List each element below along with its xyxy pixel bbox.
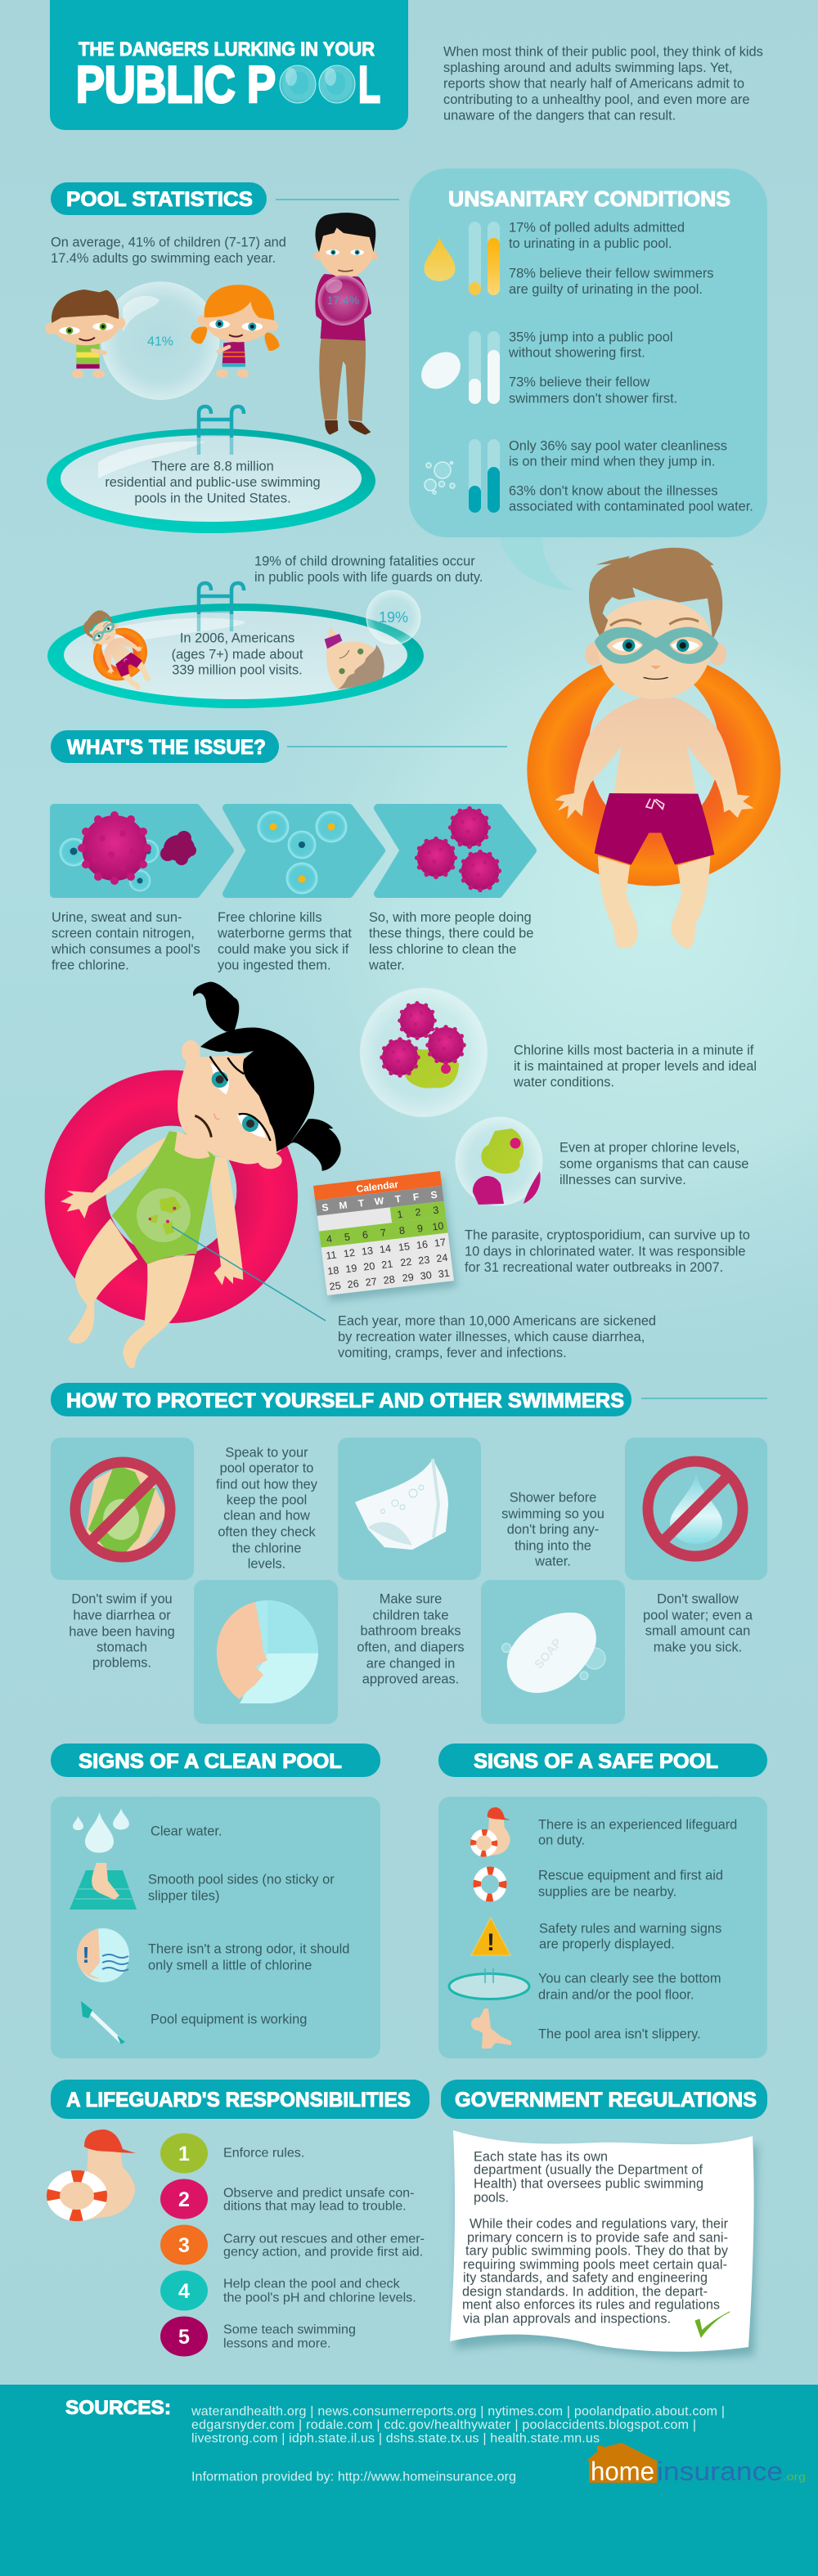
panel: issue step 1 xyxy=(54,808,230,894)
heading: how to protect xyxy=(51,1383,767,1416)
pool graphic: 339 million visits xyxy=(47,583,424,708)
issue text columns: free chlorine. xyxy=(52,958,129,973)
icon: bar of soap xyxy=(502,1613,605,1693)
icon: life ring xyxy=(474,1868,506,1901)
illustration: lifeguard xyxy=(49,2129,136,2220)
illustration: adult with 17.4% bubble xyxy=(313,213,378,435)
text: shower stats xyxy=(508,330,677,406)
paper: government regulations text: ity standards, and safety and engineering xyxy=(463,2270,708,2285)
title line two: OO xyxy=(281,57,354,110)
text: don't swim: stomach xyxy=(97,1640,147,1655)
step 2: Observe and predict unsafe con- xyxy=(223,2185,414,2200)
icon: warning sign: ! xyxy=(487,1929,495,1956)
stat text: swimmers xyxy=(51,236,286,266)
calendar: F xyxy=(412,1191,420,1203)
text: cryptosporidium xyxy=(465,1228,750,1275)
icon: odor xyxy=(77,1928,129,1982)
text: speak to operator: pool operator to xyxy=(220,1461,313,1475)
heading: signs of a clean pool xyxy=(51,1744,380,1777)
text: illnesses callout: Each year, more than 10,000 Americans are sickened xyxy=(338,1313,656,1328)
text: illnesses callout: vomiting, cramps, fever and infections. xyxy=(338,1346,567,1361)
text: chlorine kills bacteria xyxy=(513,1043,757,1089)
visits text: (ages 7+) made about xyxy=(172,648,303,662)
calendar: 14 xyxy=(379,1243,392,1255)
calendar: 4 xyxy=(326,1233,333,1245)
text: urination stats: to urinating in a public pool. xyxy=(509,236,672,251)
issue text columns: So, with more people doing xyxy=(369,910,532,925)
calendar: 13 xyxy=(361,1245,374,1258)
paper: government regulations text: While their codes and regulations vary, their xyxy=(470,2216,729,2231)
heading: what's the issue xyxy=(51,730,507,763)
text: make sure: Make sure xyxy=(380,1591,442,1606)
text: don't swim xyxy=(69,1591,175,1670)
big germ xyxy=(78,811,151,885)
text: make sure: often, and diapers xyxy=(357,1640,465,1655)
text: awareness stats xyxy=(509,438,753,514)
issue text columns: these things, there could be xyxy=(369,926,533,940)
intro paragraph: contributing to a unhealthy pool, and even more are xyxy=(443,92,750,107)
paper: government regulations text: Each state has its own xyxy=(474,2149,608,2164)
text: shower before swimming: thing into the xyxy=(515,1539,591,1554)
illustration: kids with 41% bubble: 41% xyxy=(147,334,173,348)
text: don't swim: problems. xyxy=(92,1655,151,1670)
callout line xyxy=(172,1227,326,1321)
icon: test tube xyxy=(81,2001,124,2044)
paper: government regulations text: via plan approvals and inspections. xyxy=(463,2311,671,2326)
step 5: Some teach swimming xyxy=(223,2322,356,2337)
text: rescue equipment: Rescue equipment and first aid xyxy=(538,1868,723,1883)
issue text columns: screen contain nitrogen, xyxy=(52,926,195,940)
calendar: 11 xyxy=(326,1249,337,1262)
text: no strong odor: only smell a little of chlorine xyxy=(148,1958,312,1972)
step 3: Carry out rescues and other emer- xyxy=(223,2231,425,2246)
calendar: 2 xyxy=(415,1206,421,1218)
panel: issue step 2 xyxy=(227,808,381,894)
text: don't swim: have been having xyxy=(69,1624,175,1639)
visits text: In 2006, Americans xyxy=(180,631,294,646)
step 2 xyxy=(160,2179,414,2219)
paper: government regulations text: ment also enforces its rules and regulations xyxy=(462,2298,720,2313)
calendar: 12 xyxy=(343,1247,356,1259)
text: drowning stat xyxy=(254,554,483,585)
text: don't swallow: pool water; even a xyxy=(643,1608,753,1622)
heading: a lifeguard's responsibilities: A LIFEGUARD'S RESPONSIBILITIES xyxy=(66,2089,411,2112)
text: cryptosporidium: for 31 recreational water outbreaks in 2007. xyxy=(465,1260,723,1275)
heading: what's the issue: WHAT'S THE ISSUE? xyxy=(67,736,266,759)
text: cryptosporidium: The parasite, cryptosporidium, can survive up to xyxy=(465,1228,750,1243)
icon: diaper xyxy=(355,1459,448,1550)
panel: issue step 3 xyxy=(378,806,533,894)
text: shower stats: 73% believe their fellow xyxy=(509,375,649,389)
text: pool equipment: Pool equipment is working xyxy=(151,2012,307,2026)
sources list: edgarsnyder.com | rodale.com | cdc.gov/healthywater | poolaccidents.blogspot.com | xyxy=(191,2418,696,2432)
text: clear bottom: You can clearly see the bottom xyxy=(538,1971,721,1986)
icon: bar of soap: SOAP xyxy=(532,1636,565,1672)
icon: soap xyxy=(414,344,468,397)
text: chlorine kills bacteria: it is maintained at proper levels and ideal xyxy=(514,1059,757,1074)
intro paragraph xyxy=(443,44,763,123)
text: make sure: approved areas. xyxy=(362,1672,459,1686)
calendar: T xyxy=(394,1193,402,1205)
text: lifeguard on duty: There is an experienced lifeguard xyxy=(538,1817,737,1832)
paper: government regulations text: design standards. In addition, the depart- xyxy=(462,2285,708,2300)
panel: no swimming when sick xyxy=(51,1438,194,1580)
intro paragraph: reports show that nearly half of Americans admit to xyxy=(443,77,744,92)
calendar: 17 xyxy=(434,1236,447,1249)
calendar: 8 xyxy=(398,1225,406,1236)
heading: a lifeguard's responsibilities xyxy=(51,2080,429,2119)
calendar: 1 xyxy=(397,1209,403,1220)
text: smooth pool sides xyxy=(148,1873,335,1904)
calendar: 30 xyxy=(420,1269,433,1282)
pool graphic: 8.8 million pools xyxy=(47,406,375,533)
calendar: 25 xyxy=(329,1280,342,1293)
intro paragraph: splashing around and adults swimming laps. Yet, xyxy=(443,61,733,75)
icon: face profile xyxy=(217,1600,318,1703)
pool stat text: There are 8.8 million xyxy=(151,460,274,474)
text: speak to operator: the chlorine xyxy=(232,1541,301,1555)
small germs in bubbles xyxy=(60,838,159,891)
text: surviving organisms: some organisms that can cause xyxy=(560,1156,748,1171)
paper: government regulations text: requiring swimming pools meet certain qual- xyxy=(463,2257,727,2272)
text: urination stats: are guilty of urinating in the pool. xyxy=(509,282,703,297)
icon: bubbles xyxy=(425,461,455,494)
paper: government regulations text: Health) that oversees public swimming xyxy=(474,2177,703,2192)
pool stat text xyxy=(105,460,321,505)
issue text columns: Free chlorine kills xyxy=(218,910,322,925)
step 2: 2 xyxy=(178,2188,190,2211)
panel: soap xyxy=(481,1580,625,1724)
text: don't swim: have diarrhea or xyxy=(73,1608,171,1622)
logo: home insurance: insurance xyxy=(657,2457,783,2486)
step 2: ditions that may lead to trouble. xyxy=(223,2198,407,2213)
calendar: 28 xyxy=(383,1273,396,1286)
text: shower before swimming: don't bring any- xyxy=(507,1523,599,1537)
chart: awareness bars xyxy=(469,439,500,513)
calendar: 26 xyxy=(347,1278,360,1290)
issue text columns: which consumes a pool's xyxy=(51,942,200,957)
paper: government regulations text: pools. xyxy=(474,2190,509,2205)
text: urination stats xyxy=(509,221,714,297)
sources list: livestrong.com | idph.state.il.us | dshs.state.tx.us | health.state.mn.us xyxy=(191,2432,600,2445)
icon: check mark xyxy=(695,2312,730,2337)
icon: slipping figure xyxy=(471,2008,511,2049)
text: clear bottom xyxy=(538,1971,721,2002)
text: clear water: Clear water. xyxy=(151,1824,222,1838)
calendar: 29 xyxy=(402,1272,415,1284)
stat text: swimmers: 17.4% adults go swimming each year. xyxy=(51,251,276,266)
pool stat text: residential and public-use swimming xyxy=(105,475,321,490)
panel: diaper xyxy=(338,1438,481,1580)
text: safety rules: are properly displayed. xyxy=(539,1936,675,1951)
heading: government regulations: GOVERNMENT REGULATIONS xyxy=(455,2089,757,2112)
text: shower before swimming: swimming so you xyxy=(501,1506,605,1521)
text: illnesses callout: by recreation water illnesses, which cause diarrhea, xyxy=(338,1330,645,1344)
calendar: 22 xyxy=(400,1256,412,1268)
calendar: 6 xyxy=(362,1229,369,1241)
title line two: L xyxy=(358,56,380,114)
text: not slippery: The pool area isn't slippery. xyxy=(538,2026,701,2041)
text: safety rules: Safety rules and warning signs xyxy=(539,1922,721,1936)
calendar: S xyxy=(430,1189,438,1201)
text: no strong odor xyxy=(148,1941,349,1972)
ladder xyxy=(199,583,244,631)
heading: signs of a safe pool xyxy=(438,1744,767,1777)
text: awareness stats: 63% don't know about the illnesses xyxy=(509,484,718,499)
text: urination stats: 17% of polled adults admitted xyxy=(509,221,685,236)
calendar: 15 xyxy=(398,1241,411,1254)
step 4: 4 xyxy=(178,2280,190,2303)
icon: urine drop xyxy=(424,237,455,281)
step 4 xyxy=(160,2270,416,2311)
calendar: 18 xyxy=(327,1264,339,1277)
swimmer boy mini xyxy=(68,599,166,702)
text: no strong odor: There isn't a strong odor, it should xyxy=(148,1941,349,1956)
panel: nose xyxy=(194,1580,338,1724)
19% bubble: 19% xyxy=(379,609,408,626)
icon: prohibited water drop xyxy=(648,1461,743,1556)
paper: government regulations text: department (usually the Department of xyxy=(474,2162,703,2177)
heading: signs of a clean pool: SIGNS OF A CLEAN POOL xyxy=(79,1750,342,1773)
text: urination stats: 78% believe their fellow swimmers xyxy=(509,267,714,281)
calendar: 9 xyxy=(416,1223,424,1235)
calendar: 23 xyxy=(418,1254,430,1267)
icon: prohibited stomach xyxy=(75,1462,170,1557)
girl xyxy=(191,285,280,378)
chart: shower bars xyxy=(469,331,500,404)
calendar: T xyxy=(357,1197,366,1209)
illustration: big boy in orange float xyxy=(527,548,780,949)
germ bubble: chlorine kills bacteria xyxy=(360,988,488,1117)
panel: unsanitary conditions xyxy=(409,168,767,590)
icon: lifeguard xyxy=(471,1807,510,1856)
text: surviving organisms xyxy=(560,1140,748,1187)
information credit: Information provided by: http://www.homeinsurance.org xyxy=(191,2470,516,2484)
text: speak to operator: often they check xyxy=(218,1524,316,1539)
chart: urination bars xyxy=(469,222,500,295)
19% bubble xyxy=(366,590,420,644)
issue text columns: less chlorine to clean the xyxy=(369,942,516,957)
heading: unsanitary conditions: UNSANITARY CONDITIONS xyxy=(448,186,730,211)
swimmer girl mini xyxy=(325,627,384,689)
panel: don't swallow xyxy=(625,1438,767,1580)
calendar: 7 xyxy=(380,1227,387,1239)
icon: water drops xyxy=(73,1808,129,1853)
issue text columns xyxy=(51,910,533,973)
heading: signs of a safe pool: SIGNS OF A SAFE POOL xyxy=(474,1750,718,1773)
step 1: 1 xyxy=(178,2143,190,2165)
text: speak to operator: keep the pool xyxy=(227,1493,307,1508)
text: make sure: bathroom breaks xyxy=(360,1624,461,1639)
issue text columns: waterborne germs that xyxy=(217,926,352,940)
text: speak to operator: levels. xyxy=(248,1557,285,1572)
text: chlorine kills bacteria: Chlorine kills most bacteria in a minute if xyxy=(514,1043,754,1058)
text: smooth pool sides: Smooth pool sides (no sticky or xyxy=(148,1873,335,1887)
text: make sure xyxy=(357,1591,465,1686)
calendar: M xyxy=(339,1199,348,1211)
heading: how to protect: HOW TO PROTECT YOURSELF AND OTHER SWIMMERS xyxy=(66,1389,624,1412)
step 4: the pool's pH and chlorine levels. xyxy=(223,2290,416,2304)
text: make sure: are changed in xyxy=(366,1657,455,1672)
calendar: Calendar xyxy=(356,1178,399,1195)
icon: mini pool xyxy=(449,1968,529,1999)
text: safety rules xyxy=(539,1922,721,1951)
text: clear bottom: drain and/or the pool floor. xyxy=(538,1987,694,2002)
step 5: lessons and more. xyxy=(223,2336,331,2350)
logo: home insurance xyxy=(587,2443,806,2486)
stat text: swimmers: On average, 41% of children (7-17) and xyxy=(51,236,286,250)
germ bubble: surviving organisms xyxy=(456,1117,542,1205)
text: lifeguard on duty: on duty. xyxy=(538,1833,585,1848)
icon: foot on tiles xyxy=(70,1863,137,1910)
text: drowning stat: in public pools with life guards on duty. xyxy=(254,570,483,585)
paper: government regulations text: primary concern is to provide safe and sani- xyxy=(467,2231,728,2246)
calendar: 3 xyxy=(433,1205,439,1216)
calendar: 31 xyxy=(438,1268,451,1280)
calendar: 20 xyxy=(363,1260,375,1273)
title banner xyxy=(50,0,408,130)
step 5: 5 xyxy=(178,2326,190,2349)
list: lifeguard responsibilities xyxy=(160,2133,425,2357)
title line one: THE DANGERS LURKING IN YOUR xyxy=(79,38,375,61)
boy xyxy=(45,289,125,378)
text: cryptosporidium: 10 days in chlorinated water. It was responsible xyxy=(465,1245,745,1259)
three germs xyxy=(415,806,501,892)
calendar: 5 xyxy=(344,1231,351,1243)
logo: home insurance: .org xyxy=(783,2471,806,2483)
text: drowning stat: 19% of child drowning fatalities occur xyxy=(254,554,475,569)
text: speak to operator xyxy=(216,1446,318,1572)
text: don't swallow: Don't swallow xyxy=(657,1591,739,1606)
issue text columns: Urine, sweat and sun- xyxy=(52,910,182,925)
sources heading: SOURCES: xyxy=(65,2397,171,2419)
illustration: kids with 41% bubble xyxy=(45,282,280,400)
icon: odor: ! xyxy=(82,1942,90,1968)
illustration: adult with 17.4% bubble: 17.4% xyxy=(327,294,359,307)
heading: pool statistics xyxy=(51,182,399,215)
sources list xyxy=(191,2404,725,2445)
text: shower before swimming: Shower before xyxy=(510,1490,596,1505)
text: don't swallow xyxy=(643,1591,753,1655)
text: don't swim: Don't swim if you xyxy=(71,1591,173,1606)
step 4: Help clean the pool and check xyxy=(223,2277,401,2291)
text: chlorine kills bacteria: water conditions. xyxy=(513,1075,614,1089)
issue text columns: you ingested them. xyxy=(218,958,330,973)
pool stat text: pools in the United States. xyxy=(134,491,291,505)
heading: government regulations xyxy=(441,2080,767,2119)
step 3: 3 xyxy=(178,2234,190,2257)
text: shower before swimming xyxy=(501,1490,605,1568)
calendar: W xyxy=(374,1195,385,1207)
calendar: 21 xyxy=(381,1259,393,1271)
visits text: 339 million pool visits. xyxy=(172,662,303,677)
text: awareness stats: is on their mind when they jump in. xyxy=(509,455,715,469)
issue text columns: could make you sick if xyxy=(218,942,349,957)
text: don't swallow: small amount can xyxy=(645,1624,750,1639)
footer: sources xyxy=(0,2385,818,2576)
text: shower stats: swimmers don't shower first. xyxy=(509,391,677,406)
calendar: 27 xyxy=(365,1276,378,1288)
text: don't swallow: make you sick. xyxy=(654,1640,742,1655)
calendar: S xyxy=(321,1201,329,1214)
dark germ xyxy=(160,831,196,865)
ladder xyxy=(199,406,244,455)
text: speak to operator: clean and how xyxy=(223,1508,310,1523)
visits text xyxy=(172,631,303,677)
text: surviving organisms: Even at proper chlorine levels, xyxy=(560,1140,739,1155)
text: shower stats: 35% jump into a public pool xyxy=(509,330,672,345)
calendar: 16 xyxy=(416,1239,429,1251)
text: speak to operator: find out how they xyxy=(216,1477,318,1492)
text: speak to operator: Speak to your xyxy=(225,1446,308,1461)
bubbles with germs xyxy=(258,811,347,894)
step 1: Enforce rules. xyxy=(223,2146,304,2161)
step 5 xyxy=(160,2316,356,2357)
text: illnesses callout xyxy=(338,1313,656,1361)
text: shower before swimming: water. xyxy=(534,1554,571,1568)
step 1 xyxy=(160,2133,304,2174)
text: rescue equipment xyxy=(538,1868,723,1899)
intro paragraph: unaware of the dangers that can result. xyxy=(443,108,676,123)
paper: government regulations text: tary public swimming pools. They do that by xyxy=(465,2244,729,2259)
logo: home insurance: home xyxy=(591,2457,654,2486)
title line two: PUBLIC P xyxy=(76,56,276,114)
paper: government regulations text xyxy=(450,2130,757,2358)
sources list: waterandhealth.org | news.consumerreports.org | nytimes.com | poolandpatio.about.com | xyxy=(191,2404,725,2419)
text: lifeguard on duty xyxy=(538,1817,737,1848)
text: make sure: children take xyxy=(373,1608,448,1622)
icon: warning sign xyxy=(471,1918,510,1956)
step 3: gency action, and provide first aid. xyxy=(223,2244,423,2259)
panel: clean pool signs xyxy=(51,1797,380,2058)
text: awareness stats: Only 36% say pool water cleanliness xyxy=(509,438,727,453)
text: rescue equipment: supplies are be nearby. xyxy=(538,1884,676,1899)
issue text columns: water. xyxy=(368,958,405,973)
text: smooth pool sides: slipper tiles) xyxy=(148,1889,219,1904)
calendar: 24 xyxy=(436,1252,448,1264)
calendar: 19 xyxy=(345,1263,357,1275)
intro paragraph: When most think of their public pool, they think of kids xyxy=(443,44,763,59)
text: surviving organisms: illnesses can survive. xyxy=(560,1173,686,1187)
illustration: sick girl on pink float xyxy=(45,982,341,1368)
calendar xyxy=(313,1171,456,1301)
text: shower stats: without showering first. xyxy=(508,345,645,360)
heading: pool statistics: POOL STATISTICS xyxy=(66,188,253,211)
text: awareness stats: associated with contaminated pool water. xyxy=(509,499,753,514)
panel: safe pool signs xyxy=(438,1797,767,2058)
calendar: 10 xyxy=(432,1220,444,1233)
step 3 xyxy=(160,2224,425,2265)
